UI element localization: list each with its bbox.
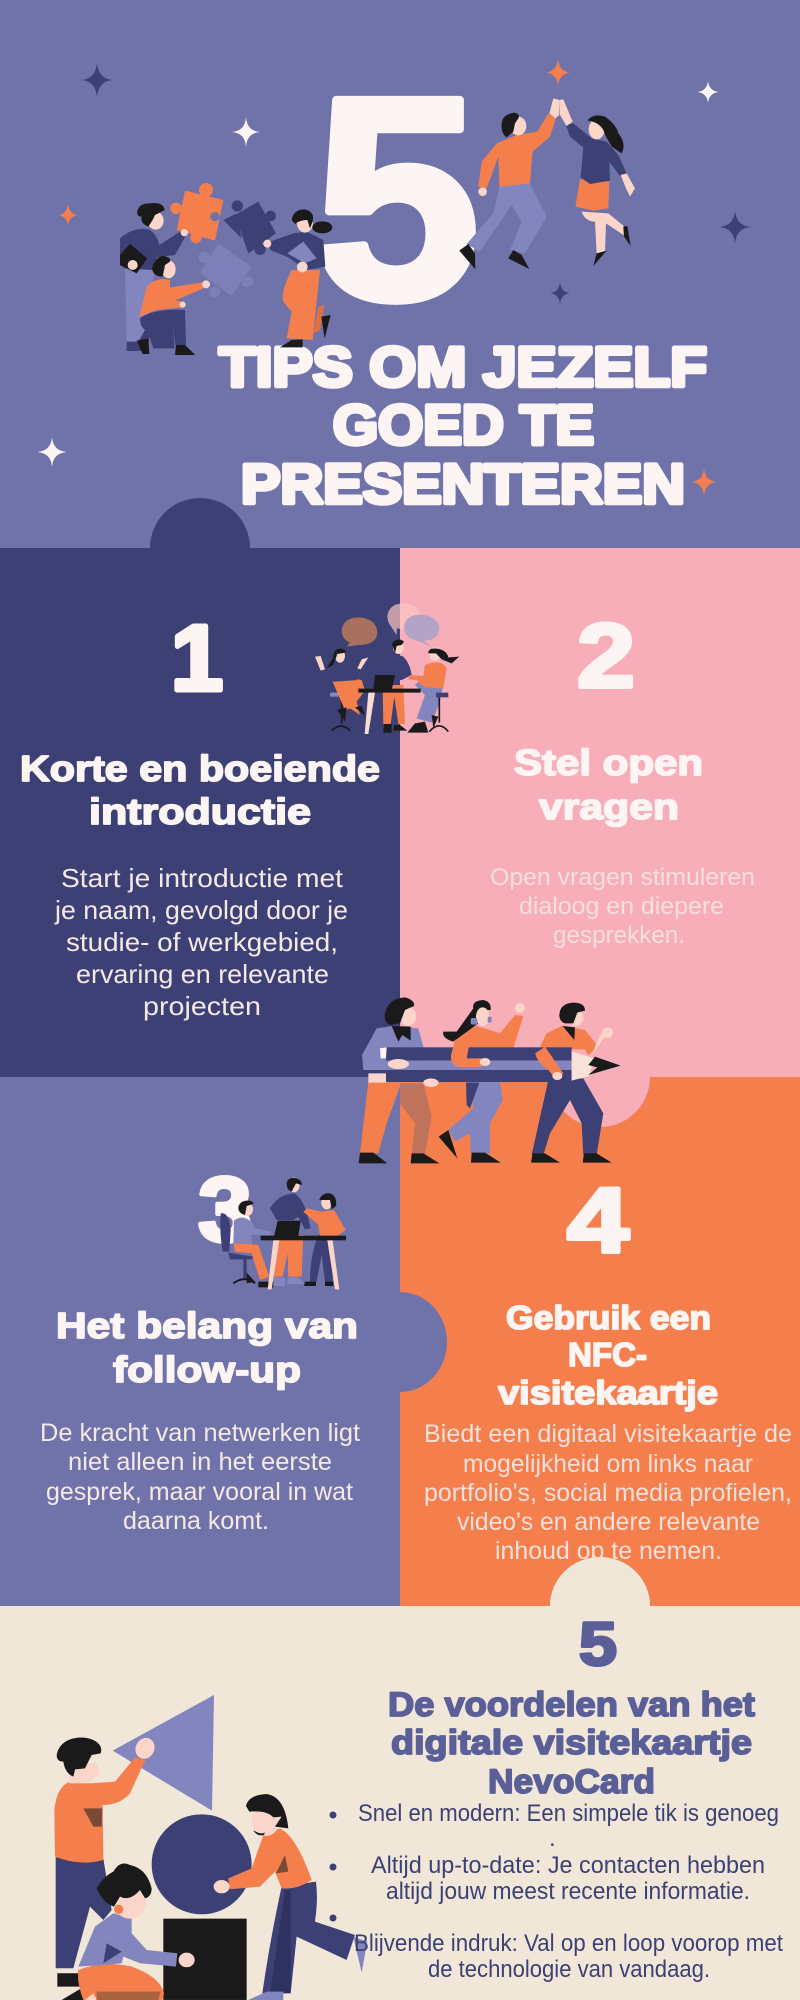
number 5 in last panel: 5 <box>579 1610 617 1678</box>
hands and arms on pencil <box>380 1040 563 1087</box>
person: man jumping <box>459 98 559 269</box>
body text: tip 4 <box>424 1420 792 1565</box>
table <box>261 1236 346 1289</box>
illustration: team assembling puzzle <box>120 183 332 355</box>
panel: tip 2 background <box>400 548 800 1077</box>
triangle shape <box>113 1695 214 1811</box>
body text: tip 4: video's en andere relevante <box>457 1508 760 1536</box>
number 2: 2 <box>577 606 635 707</box>
heading: tip 4: visitekaartje <box>498 1374 718 1411</box>
illustration: building shapes team <box>54 1695 367 2000</box>
heading: tip 5: digitale visitekaartje <box>391 1724 752 1762</box>
big number 5: 5 <box>314 38 480 360</box>
heading: tip 1: introductie <box>89 791 311 832</box>
table <box>358 689 421 734</box>
bullet list: altijd jouw meest recente informatie. <box>386 1878 750 1905</box>
person: standing man <box>120 203 188 351</box>
person: man left <box>359 997 439 1163</box>
heading: tip 3: Het belang van <box>56 1305 358 1346</box>
person: crouching woman <box>78 1863 195 2000</box>
illustration: high five couple <box>459 98 635 269</box>
decorative stars <box>37 59 751 496</box>
person: woman middle <box>439 1000 525 1163</box>
bullet list <box>330 1800 783 1983</box>
panel: tip 4 background <box>400 1077 800 1606</box>
body text: tip 3: De kracht van netwerken ligt <box>40 1419 360 1447</box>
panel: tip 5 background <box>0 1557 800 2000</box>
body text: tip 1: je naam, gevolgd door je <box>54 895 348 925</box>
heading: tip 4: NFC- <box>568 1336 647 1373</box>
body text: tip 4: inhoud op te nemen. <box>495 1537 722 1565</box>
bullet list: de technologie van vandaag. <box>428 1956 710 1983</box>
heading: tip 1 <box>20 748 380 832</box>
number 1: 1 <box>171 606 223 710</box>
body text: tip 3: niet alleen in het eerste <box>68 1448 332 1476</box>
person: seated man <box>220 1201 273 1287</box>
body text: tip 3: gesprek, maar vooral in wat <box>46 1478 353 1506</box>
body text: tip 2: dialoog en diepere <box>519 893 724 920</box>
person: man pushing circle <box>214 1794 367 2000</box>
body text: tip 2: Open vragen stimuleren <box>490 864 755 891</box>
body text: tip 4: mogelijkheid om links naar <box>463 1450 753 1478</box>
heading: tip 5: NevoCard <box>488 1763 655 1801</box>
person: kneeling man <box>137 256 210 355</box>
body text: tip 4: Biedt een digitaal visitekaartje de <box>424 1420 792 1448</box>
person: woman with ponytail <box>407 647 459 733</box>
person: woman with folder <box>263 209 332 347</box>
panel: tip 1 background <box>0 498 447 1077</box>
body text: tip 2: gesprekken. <box>553 922 685 949</box>
speech bubbles <box>342 603 439 647</box>
icon: navy puzzle piece <box>223 200 276 255</box>
heading: tip 2: vragen <box>539 786 679 827</box>
body text: tip 3 <box>40 1419 360 1535</box>
circle shape <box>152 1814 252 1914</box>
heading: tip 4: Gebruik een <box>506 1299 711 1336</box>
person: woman <box>303 1193 346 1286</box>
cream puzzle tab overlapping text <box>550 1557 650 1655</box>
heading: tip 4 <box>498 1299 718 1411</box>
body text: tip 3: daarna komt. <box>123 1507 269 1535</box>
body text: tip 1: ervaring en relevante <box>76 959 329 989</box>
body text: tip 1: studie- of werkgebied, <box>66 927 338 957</box>
body text: tip 4: portfolio's, social media profielen, <box>424 1479 792 1507</box>
illustration: three people carrying a pencil <box>359 997 621 1163</box>
number 3: 3 <box>198 1159 252 1261</box>
panel: header background <box>0 0 800 548</box>
person: standing man at laptop <box>373 640 412 733</box>
heading: tip 3: follow-up <box>113 1349 301 1390</box>
heading: tip 5 <box>388 1686 755 1801</box>
illustration: colleagues at laptop <box>220 1178 346 1289</box>
title: TIPS OM JEZELF <box>219 335 707 398</box>
heading: tip 2: Stel open <box>514 742 703 783</box>
icon: orange puzzle piece <box>170 183 223 243</box>
body text: tip 1 <box>54 863 348 1021</box>
title: GOED TE <box>333 393 594 456</box>
title: PRESENTEREN <box>241 452 685 515</box>
person: woman jumping <box>559 99 635 266</box>
person: man reaching up <box>54 1735 158 2000</box>
body text: tip 1: Start je introductie met <box>61 863 344 893</box>
icon: light puzzle piece <box>198 243 253 297</box>
body text: tip 1: projecten <box>143 991 261 1021</box>
person: woman on stool <box>315 649 368 731</box>
panel: tip 3 background <box>0 1077 447 1606</box>
heading: tip 5: De voordelen van het <box>388 1686 755 1724</box>
person: standing man <box>270 1178 311 1286</box>
body text: tip 2 <box>490 864 755 949</box>
person: man right <box>531 1003 613 1163</box>
title <box>219 335 707 515</box>
bullet list: . <box>549 1825 556 1852</box>
illustration: conversation at table <box>315 603 459 734</box>
pencil <box>386 1047 621 1082</box>
number 4: 4 <box>567 1170 629 1272</box>
heading: tip 1: Korte en boeiende <box>20 748 380 789</box>
bullet list: Altijd up-to-date: Je contacten hebben <box>371 1852 765 1879</box>
heading: tip 3 <box>56 1305 358 1390</box>
puzzle tab: pink into orange <box>550 1027 650 1127</box>
heading: tip 2 <box>514 742 703 827</box>
square shape <box>163 1919 247 2000</box>
